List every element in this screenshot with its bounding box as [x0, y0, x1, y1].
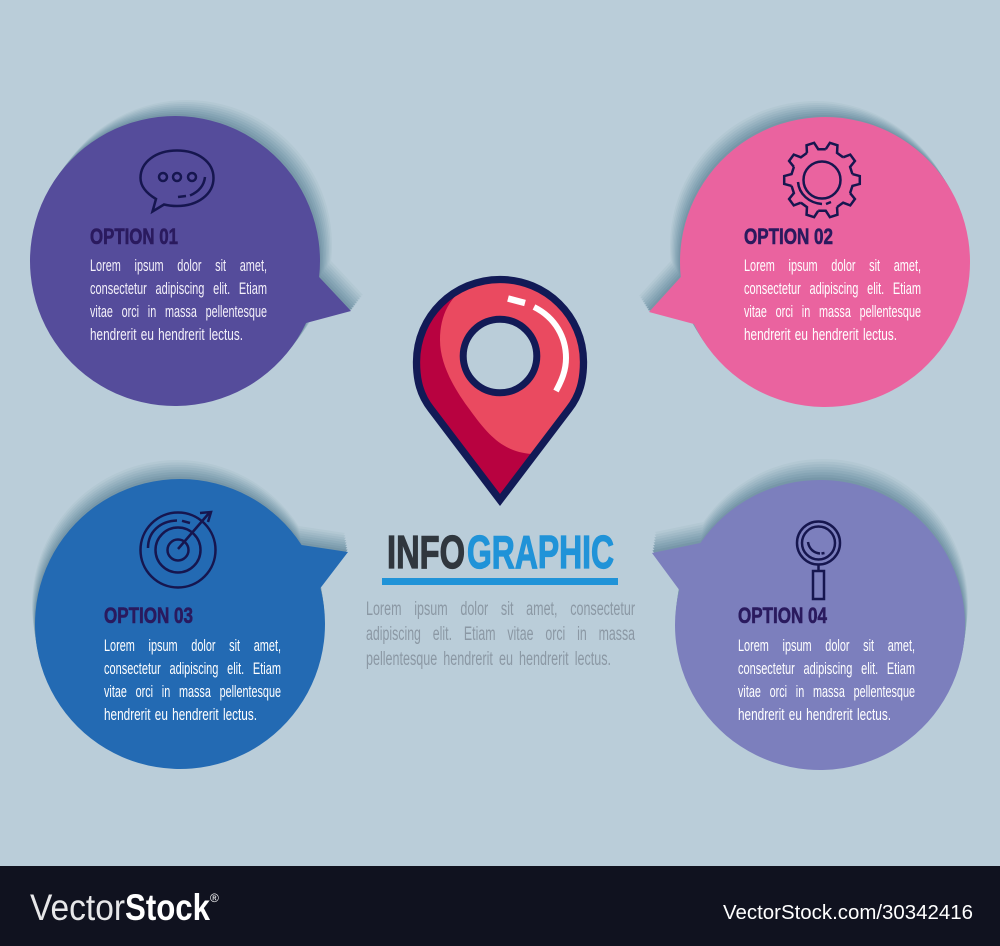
icon: target with arrow	[140, 512, 216, 588]
text block: intro paragraph: Lorem ipsum dolor sit amet, consectetur	[366, 599, 635, 620]
panel: option 01 speech bubble	[30, 100, 363, 406]
panel: option 04 speech bubble	[652, 459, 968, 770]
footer logo: Vector	[30, 887, 125, 928]
icon: central map pin	[416, 270, 600, 500]
icon: speech balloon	[140, 150, 214, 212]
text block: option 03: Lorem ipsum dolor sit amet,	[104, 636, 281, 655]
icon: magnifying glass	[797, 522, 840, 599]
text block: intro paragraph: pellentesque hendrerit eu hendrerit lectus.	[366, 649, 611, 670]
footer bar	[0, 866, 1000, 946]
icon: gear	[784, 140, 860, 220]
title: GRAPHIC	[467, 526, 614, 578]
title underline	[382, 578, 618, 585]
text block: option 03	[104, 636, 281, 724]
text block: option 01: Lorem ipsum dolor sit amet,	[90, 256, 267, 275]
heading: option 04: OPTION 04	[738, 603, 828, 628]
panel: option 03 speech bubble	[32, 460, 348, 769]
text block: option 03: hendrerit eu hendrerit lectus.	[104, 705, 257, 724]
footer logo: ®	[210, 891, 219, 905]
text block: option 03: consectetur adipiscing elit. Etiam	[104, 659, 281, 678]
panel: option 02 speech bubble	[639, 101, 970, 407]
text block: option 02: hendrerit eu hendrerit lectus.	[744, 325, 897, 344]
heading: option 01: OPTION 01	[90, 224, 178, 249]
text block: intro paragraph	[366, 599, 635, 670]
text block: option 02	[744, 256, 921, 344]
text block: option 03: vitae orci in massa pellentesque	[104, 682, 281, 701]
text block: intro paragraph: adipiscing elit. Etiam vitae orci in massa	[366, 624, 635, 645]
heading: option 02: OPTION 02	[744, 224, 833, 249]
title: INFO	[387, 526, 465, 578]
footer logo: Stock	[125, 887, 210, 928]
text block: option 01: vitae orci in massa pellentesque	[90, 302, 267, 321]
footer image id: VectorStock.com/30342416	[723, 902, 973, 924]
heading: option 03: OPTION 03	[104, 603, 193, 628]
footer logo	[30, 887, 219, 928]
text block: option 01	[90, 256, 267, 344]
title	[387, 526, 614, 578]
text block: option 04	[738, 636, 915, 724]
text block: option 01: consectetur adipiscing elit. Etiam	[90, 279, 267, 298]
text block: option 04: hendrerit eu hendrerit lectus.	[738, 705, 891, 724]
text block: option 01: hendrerit eu hendrerit lectus.	[90, 325, 243, 344]
